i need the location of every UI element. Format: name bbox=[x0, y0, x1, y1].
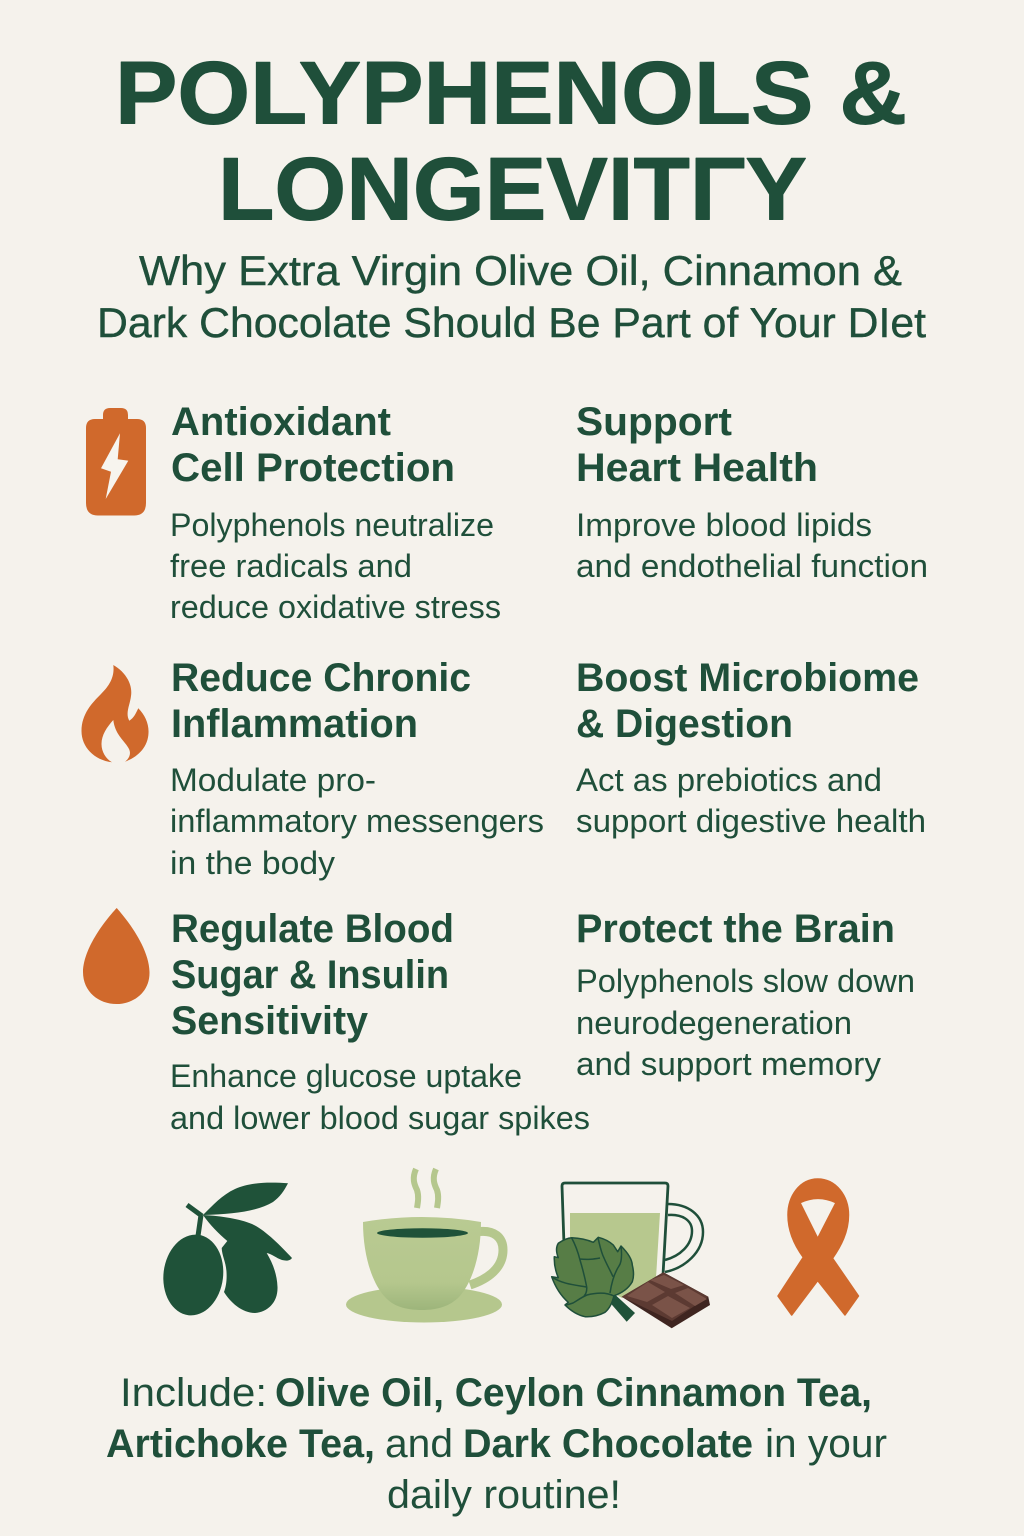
panel: regulate blood sugar bbox=[83, 907, 590, 1136]
body text bbox=[576, 963, 915, 1082]
heading: Heart Health bbox=[576, 446, 818, 490]
body text: Polyphenols slow down bbox=[576, 963, 915, 999]
body text bbox=[170, 507, 501, 625]
title: LONGEVITΓY bbox=[218, 138, 807, 238]
icon: battery with lightning bolt bbox=[86, 408, 146, 516]
heading: Support bbox=[576, 400, 732, 444]
body text: Polyphenols neutralize bbox=[170, 507, 494, 543]
panel: support heart health bbox=[576, 400, 928, 584]
subtitle: Dark Chocolate Should Be Part of Your DIet bbox=[97, 299, 926, 346]
closing call to action: Include: bbox=[120, 1371, 267, 1415]
body text bbox=[170, 1058, 590, 1136]
heading bbox=[171, 907, 454, 1043]
panel: antioxidant cell protection bbox=[86, 400, 501, 625]
closing call to action bbox=[106, 1371, 887, 1517]
body text: and lower blood sugar spikes bbox=[170, 1100, 590, 1136]
body text bbox=[576, 762, 926, 839]
heading: Boost Microbiome bbox=[576, 656, 919, 700]
heading bbox=[171, 656, 471, 746]
subtitle bbox=[97, 247, 926, 346]
icon: awareness ribbon bbox=[778, 1179, 858, 1315]
closing call to action: daily routine! bbox=[387, 1473, 621, 1517]
body text: free radicals and bbox=[170, 548, 412, 584]
closing call to action: Dark Chocolate bbox=[463, 1422, 753, 1466]
heading bbox=[576, 400, 818, 490]
icon: drop bbox=[83, 908, 150, 1004]
body text: reduce oxidative stress bbox=[170, 589, 501, 625]
heading: Protect the Brain bbox=[576, 907, 895, 951]
body text: support digestive health bbox=[576, 803, 926, 839]
body text: Modulate pro- bbox=[170, 762, 376, 798]
heading: Sensitivity bbox=[171, 999, 369, 1043]
heading bbox=[171, 400, 455, 490]
title bbox=[115, 42, 907, 238]
subtitle: Why Extra Virgin Olive Oil, Cinnamon & bbox=[139, 247, 902, 294]
heading: Reduce Chronic bbox=[171, 656, 471, 700]
body text: neurodegeneration bbox=[576, 1005, 852, 1041]
body text bbox=[170, 762, 544, 881]
closing call to action: Olive Oil, Ceylon Cinnamon Tea, bbox=[275, 1371, 872, 1415]
icon: cinnamon tea cup bbox=[346, 1169, 503, 1322]
body text: and endothelial function bbox=[576, 548, 928, 584]
panel: reduce chronic inflammation bbox=[82, 656, 544, 881]
closing call to action: Artichoke Tea, bbox=[106, 1422, 375, 1466]
body text: Act as prebiotics and bbox=[576, 762, 882, 798]
body text: Enhance glucose uptake bbox=[170, 1058, 522, 1094]
heading bbox=[576, 656, 919, 746]
panel: boost microbiome and digestion bbox=[576, 656, 926, 839]
closing call to action: in your bbox=[765, 1422, 887, 1466]
body text: in the body bbox=[170, 845, 335, 881]
heading: Cell Protection bbox=[171, 446, 455, 490]
glass mug bbox=[562, 1183, 703, 1298]
dark chocolate bbox=[622, 1272, 710, 1328]
heading: Inflammation bbox=[171, 702, 418, 746]
closing call to action: and bbox=[385, 1422, 453, 1466]
panel: protect the brain bbox=[576, 907, 915, 1082]
body text: and support memory bbox=[576, 1046, 881, 1082]
title: POLYPHENOLS & bbox=[115, 42, 907, 142]
heading: Antioxidant bbox=[171, 400, 391, 444]
body text: Improve blood lipids bbox=[576, 507, 872, 543]
heading: Regulate Blood bbox=[171, 907, 454, 951]
body text bbox=[576, 507, 928, 584]
icon: flame bbox=[82, 665, 149, 762]
heading: Sugar & Insulin bbox=[171, 953, 449, 997]
heading: & Digestion bbox=[576, 702, 793, 746]
artichoke bbox=[552, 1237, 635, 1322]
icon: artichoke tea and dark chocolate bbox=[552, 1183, 710, 1328]
icon: olive branch bbox=[159, 1183, 292, 1319]
body text: inflammatory messengers bbox=[170, 803, 544, 839]
